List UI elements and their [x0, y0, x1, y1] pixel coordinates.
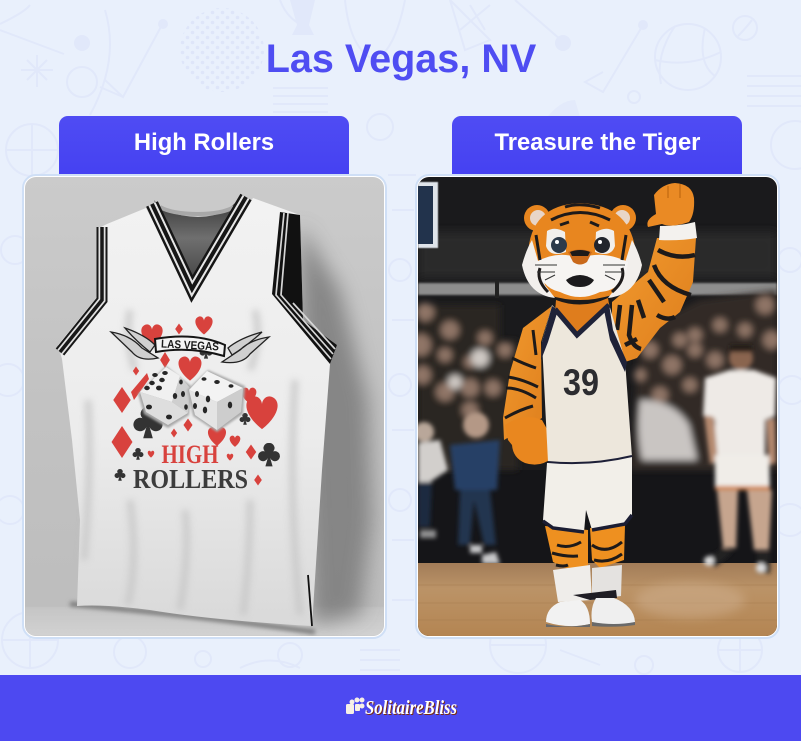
- neck ruff: [555, 298, 609, 335]
- white jersey: [542, 304, 632, 463]
- jersey: [58, 194, 337, 626]
- jersey graphic: High Rollers wordmark: HIGH: [162, 440, 218, 469]
- tab heading: Treasure the Tiger: [452, 116, 742, 176]
- socks and shoes: [546, 565, 635, 627]
- jersey graphic: High Rollers wordmark: [133, 446, 247, 488]
- jersey graphic: Las Vegas banner with wings: [111, 328, 269, 363]
- jersey graphic: right die: [187, 370, 245, 432]
- logo: Solitaire Bliss: SolitaireBliss: [365, 697, 457, 719]
- left arm: [503, 306, 552, 440]
- wrist cuff: [659, 222, 697, 240]
- raised arm: [612, 238, 696, 362]
- tab heading: High Rollers: High Rollers: [134, 129, 274, 156]
- tab heading: High Rollers: [59, 116, 349, 176]
- jersey graphic: High Rollers wordmark: ROLLERS: [133, 464, 248, 494]
- right armhole trim: [272, 212, 337, 364]
- background player: [703, 345, 776, 573]
- tab heading: Treasure the Tiger: Treasure the Tiger: [495, 129, 700, 156]
- jersey graphic: playing card suits: [112, 316, 280, 486]
- blurred crowd: [409, 290, 781, 564]
- seated spectator in blue: [414, 412, 500, 564]
- backboard: [418, 182, 438, 248]
- tiger mascot: [503, 183, 697, 627]
- doodle dots and filled marks: [74, 0, 648, 120]
- fabric folds: [84, 310, 300, 615]
- jersey number 39: 39: [563, 362, 599, 403]
- head: [522, 203, 642, 300]
- v-neck trim: [152, 197, 246, 289]
- side seam: [308, 575, 312, 626]
- jersey neck opening: [154, 194, 242, 275]
- footer bar: [0, 675, 801, 741]
- left fist: [508, 419, 548, 465]
- logo: Solitaire Bliss: SolitaireBliss: [366, 698, 458, 720]
- shorts: [543, 457, 632, 532]
- title: Las Vegas, NV: [266, 37, 537, 81]
- logo icon: cards cluster: [346, 698, 364, 714]
- raised hand: [647, 183, 694, 227]
- hardwood floor: [418, 563, 777, 636]
- jersey graphic: left die: [138, 366, 191, 428]
- panel: High Rollers jersey image: [23, 175, 386, 638]
- left armhole trim: [60, 227, 102, 352]
- jersey cast shadow: [300, 225, 372, 625]
- jersey graphic: Las Vegas banner with wings: LAS VEGAS: [161, 338, 219, 354]
- arena background: [418, 231, 777, 296]
- legs: [545, 525, 625, 568]
- logo: Solitaire Bliss: [346, 697, 458, 720]
- panel: Treasure the Tiger mascot image: [409, 175, 781, 638]
